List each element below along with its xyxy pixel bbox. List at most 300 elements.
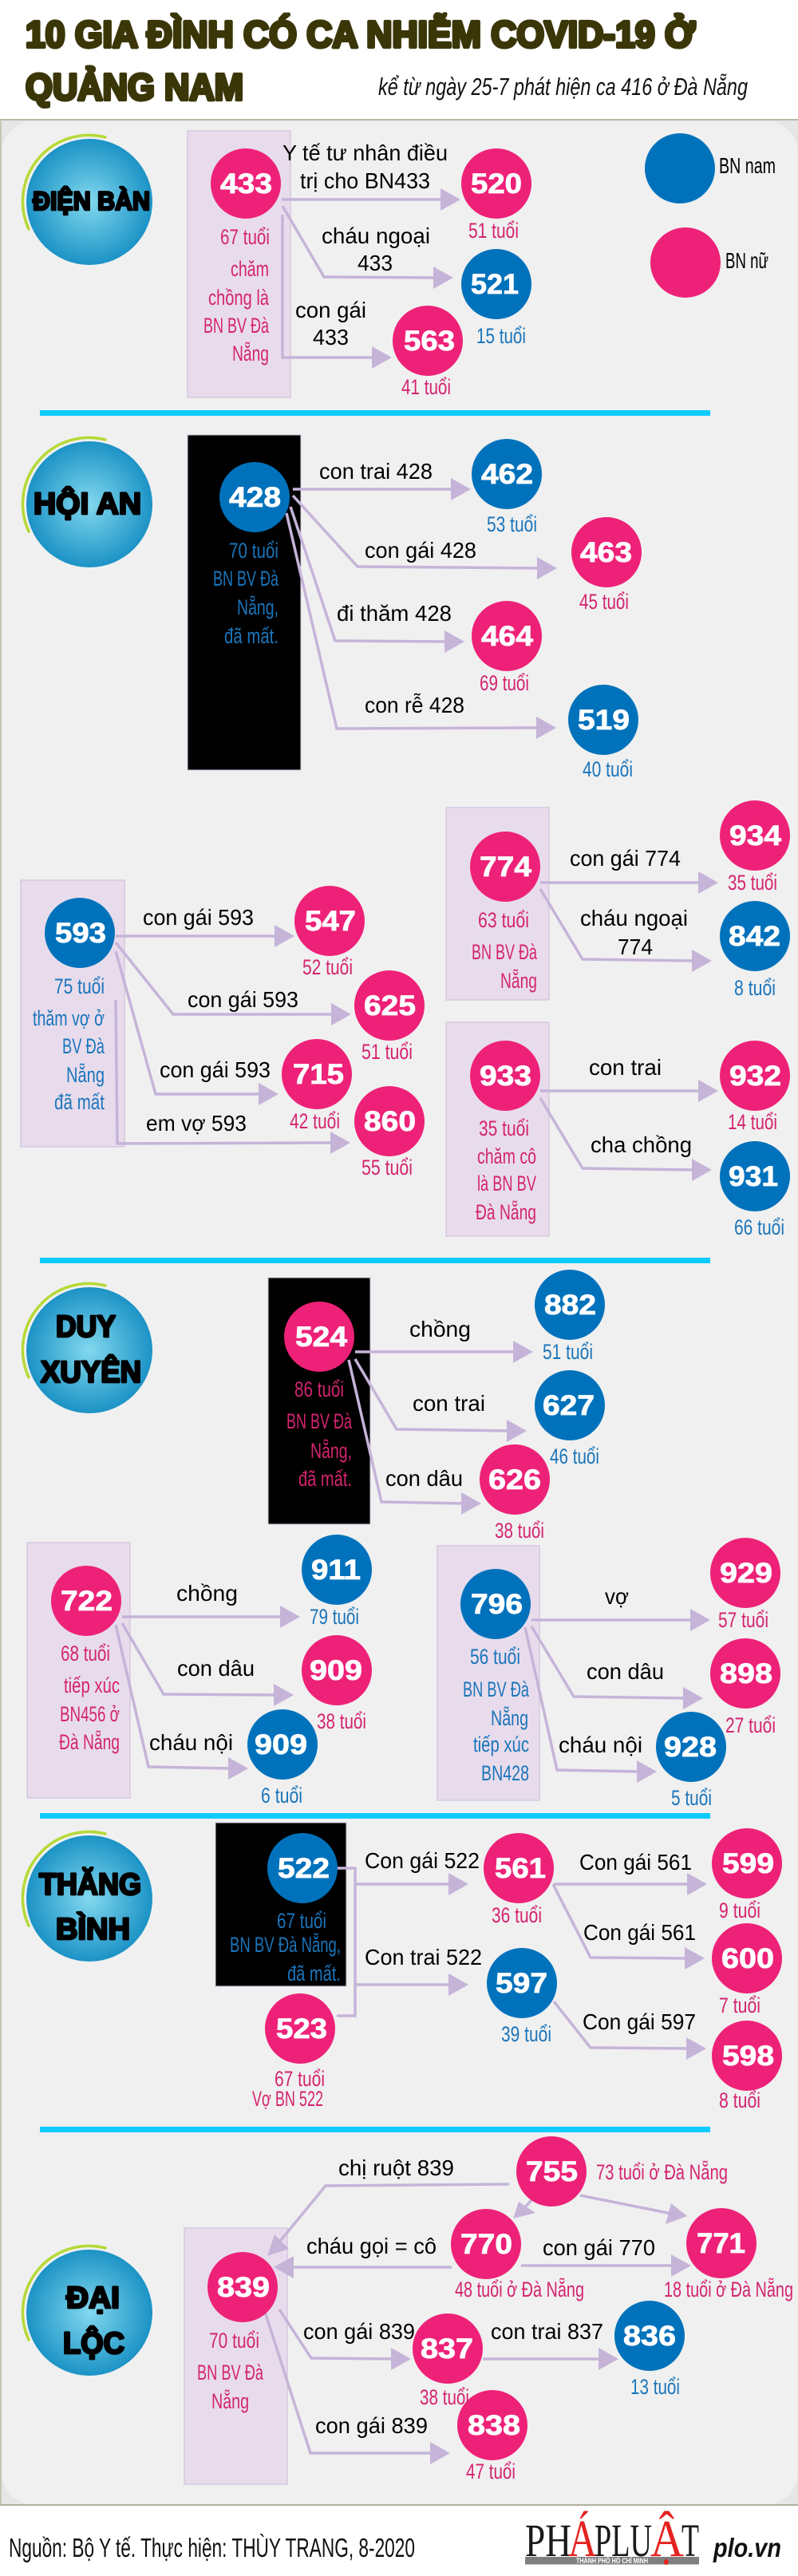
relation labels: con trai 428 [319,459,433,484]
arrow: 796 to 928 [525,1627,657,1783]
relation labels: 774 [618,934,653,959]
node 882: 882 [544,1290,596,1321]
text: 428 details [213,539,279,648]
node 774 [470,832,540,902]
panel: Thăng Bình [22,1823,782,2112]
ages: 79 tuổi [310,1605,359,1629]
node 839 [207,2252,278,2322]
arrow: 933 to 931 [540,1098,712,1181]
arrow: 433 to 520 [282,188,460,211]
badge: Đại Lộc [22,2246,152,2376]
node 755 [516,2136,587,2207]
ages: 51 tuổi [468,219,519,243]
node 521 [461,249,531,319]
ages: 53 tuổi [487,512,537,536]
node 771 [686,2208,757,2278]
arrow: 933 to 932 [540,1080,718,1102]
ages [261,1605,366,1808]
ages: 42 tuổi [290,1109,340,1133]
relation labels: con gái 839 [303,2319,415,2344]
node 909 pink: 909 [310,1655,362,1686]
text: 839 details [197,2329,264,2413]
arrow: 524 to 627 [355,1359,527,1442]
text: 593 details: Nẵng [66,1062,105,1087]
node 520 [461,148,531,219]
text: 522 details: 67 tuổi [277,1909,326,1933]
node 933: 933 [480,1061,531,1092]
node 898: 898 [720,1658,772,1689]
node 836 [614,2301,685,2371]
arrow: to 597 [355,1973,468,1996]
node 428 [219,462,290,532]
relation labels: Con gái 522 [365,1848,480,1873]
relation labels: con gái 774 [570,846,681,871]
node 600: 600 [721,1943,774,1974]
ages: 6 tuổi [261,1784,302,1808]
badge: Điện Bàn [22,135,152,265]
node 934 [720,800,790,871]
relation labels [385,1317,485,1491]
text: 796 details: tiếp xúc [473,1732,529,1756]
box: patient 722 [27,1543,130,1798]
relation labels: chị ruột 839 [338,2155,454,2180]
relation labels: con gái 839 [315,2413,428,2438]
arrow: 593 to 547 [116,925,294,947]
ages: 47 tuổi [466,2459,516,2483]
relation labels: con dâu [385,1466,463,1491]
box: patient 428 [188,435,301,770]
logo: plo.vn: plo.vn [713,2533,781,2562]
badge: Đại Lộc: LỘC [63,2325,124,2361]
ages: 14 tuổi [728,1110,777,1134]
arrow: 524 to 882 [355,1341,533,1363]
text: 933 details [476,1116,536,1224]
node 842 [720,901,790,971]
node 722: 722 [61,1586,113,1617]
panel: Hội An [21,435,790,1239]
legend: BN nữ [725,248,768,273]
node 837 [413,2313,483,2384]
ages [728,1110,784,1239]
node 755: 755 [526,2156,578,2187]
relation labels: con dâu [587,1659,664,1684]
node 524 [284,1302,354,1372]
box: patient 593 [21,880,124,1147]
node 842: 842 [729,921,780,952]
arrow: 593 to 625 [116,942,351,1025]
relation labels: Con gái 561 [583,1920,696,1945]
node 462 [472,439,542,509]
title: 10 GIA ĐÌNH CÓ CA NHIỄM COVID-19 Ở [26,14,696,55]
arrow: 593 to 860 [116,1000,350,1154]
text: 933 details: 35 tuổi [479,1116,529,1140]
node 523: 523 [276,2013,327,2045]
node 522 [267,1833,338,1903]
node 929 [710,1538,780,1608]
node 593 [45,898,115,968]
arrow: 433 to 563 [282,215,392,369]
text: 774 details: BN BV Đà [472,940,538,964]
node 598 [712,2021,782,2091]
text: 933 details: chăm cô [477,1144,536,1168]
text: 933 details: là BN BV [477,1171,536,1195]
node 433: 433 [220,168,272,200]
title: QUẢNG NAM [26,66,243,108]
node 524: 524 [295,1322,348,1353]
text: 433 details: chồng là [208,286,270,310]
relation labels: Con trai 522 [365,1945,482,1970]
ages: 27 tuổi [725,1713,776,1737]
relation labels: Con gái 561 [579,1850,692,1875]
arrow: 839 to 837 [279,2309,411,2370]
ages: 48 tuổi ở Đà Nẵng [455,2277,584,2301]
node 563: 563 [404,326,455,357]
arrow: 524 to 626 [349,1360,481,1515]
ages: 8 tuổi [719,2088,760,2112]
relation labels: con trai [413,1391,485,1416]
panel: Đại Lộc [22,2136,793,2484]
node 428: 428 [229,482,281,513]
logo: Pháp Luật: Á [568,2510,597,2568]
relation labels: con gái 593 [160,1057,271,1082]
logo: Pháp Luật: Ậ [650,2510,684,2568]
node 563 [393,306,463,376]
ages: 46 tuổi [550,1444,599,1468]
text: 433 details: Nẵng [232,341,269,365]
node 597 [487,1948,557,2018]
text: 796 details: BN428 [481,1761,529,1785]
node 626 [480,1444,550,1515]
text: 593 details: đã mất [54,1090,105,1114]
ages: 39 tuổi [501,2022,551,2046]
text: 433 details: 67 tuổi [220,225,270,249]
text: 428 details: Nẵng, [237,595,279,619]
text: 523 details: Vợ BN 522 [252,2087,323,2111]
relation labels: con gái 770 [543,2235,655,2260]
relation labels [282,140,448,350]
text: 722 details: tiếp xúc [64,1673,120,1697]
node 600 [712,1923,782,1993]
ages: 5 tuổi [671,1786,712,1810]
node 771: 771 [697,2228,745,2259]
arrow: 770 to 839 [274,2256,452,2278]
ages: 35 tuổi [728,871,777,895]
relation labels: cháu ngoại [322,223,430,248]
ages: 7 tuổi [719,1993,760,2017]
box: patient 524 [268,1278,370,1524]
node 625 [354,970,425,1041]
badge: Duy Xuyên [22,1283,152,1413]
text: 523 details [252,2067,325,2111]
arrow: 593 to 715 [116,951,279,1105]
node 519: 519 [578,705,630,736]
node 715: 715 [293,1059,344,1090]
relation labels: vợ [605,1584,629,1609]
relation labels [143,905,298,1136]
text: 774 details: Nẵng [500,968,537,993]
arrow: 722 to 909 pink [122,1623,294,1706]
node 911 [302,1535,372,1605]
node 882 [535,1270,605,1340]
arrow: 770 to 771 [521,2254,691,2277]
arrow: 796 to 929 [531,1609,710,1631]
text: 796 details: BN BV Đà [463,1677,530,1701]
node 598: 598 [722,2041,774,2072]
text: 839 details: Nẵng [211,2388,249,2413]
arrow: 774 to 842 [540,889,712,972]
node 931: 931 [729,1161,778,1192]
node 770: 770 [460,2229,512,2260]
relation labels: con gái 593 [143,905,254,930]
text: 774 details: 63 tuổi [478,908,529,932]
ages: 8 tuổi [734,976,776,1000]
relation labels: con trai 837 [491,2319,603,2344]
ages [420,2159,793,2483]
ages: 69 tuổi [480,671,529,695]
title [26,14,696,108]
node 928: 928 [664,1732,717,1763]
badge: Thăng Bình [22,1831,152,1962]
box: patient 839 [184,2228,287,2484]
arrow: 428 to 464 [290,507,464,653]
node 836: 836 [623,2321,676,2352]
ages: 13 tuổi [630,2375,680,2399]
text: 722 details: Đà Nẵng [59,1729,120,1754]
relation labels: con dâu [177,1656,255,1681]
relation labels: trị cho BN433 [300,168,430,193]
logo: Pháp Luật: PH [525,2515,571,2566]
text: 524 details: 86 tuổi [294,1377,344,1401]
relation labels [149,1581,255,1755]
arrow: 722 to 909 blue [116,1625,248,1780]
arrow: 428 to 519 [286,513,556,739]
node 561: 561 [495,1853,546,1884]
ages: 57 tuổi [718,1608,768,1632]
text: 722 details: 68 tuổi [61,1642,110,1665]
text: 522 details: đã mất. [287,1962,341,1985]
text: 428 details: 70 tuổi [229,539,279,563]
box: patient 522 [215,1823,346,1986]
node 796 [460,1569,531,1639]
relation labels: Y tế tư nhân điều [282,140,448,165]
badge: Thăng Bình: BÌNH [56,1911,130,1946]
text: 593 details: thăm vợ ở [33,1006,105,1030]
text: 593 details [33,974,105,1114]
relation labels: cháu gọi = cô [306,2234,437,2258]
node 932 [720,1041,790,1111]
relation labels: con gái [295,298,366,322]
node 715 [282,1039,352,1109]
text: 593 details: 75 tuổi [54,974,105,998]
relation labels: 433 [313,325,349,350]
text: 524 details: Nẵng, [310,1438,352,1463]
text: 796 details: Nẵng [491,1705,528,1730]
text: 593 details: BV Đà [62,1034,105,1058]
text: 428 details: BN BV Đà [213,567,279,591]
footer credit: Nguồn: Bộ Y tế. Thực hiện: THÙY TRANG, 8-2020 [9,2533,415,2562]
ages: 9 tuổi [719,1898,760,1922]
node 722 [51,1566,121,1636]
badge: Thăng Bình: THĂNG [39,1867,141,1902]
ages [401,219,526,399]
ages: 51 tuổi [361,1040,413,1064]
node 462: 462 [481,459,533,490]
relation labels: con gái 593 [188,987,298,1012]
arrow: to 561 [355,1873,468,1895]
node 929: 929 [720,1558,772,1589]
ages [671,1608,776,1810]
logo: Pháp Luật [525,2510,699,2568]
arrow: 755 to 839 [267,2184,509,2256]
arrow: 433 to 521 [282,206,453,289]
text: 433 details: BN BV Đà [203,314,270,338]
node 909 blue: 909 [255,1729,307,1760]
relation labels: chồng [409,1317,471,1341]
relation labels [570,846,688,959]
text: 933 details: Đà Nẵng [476,1199,536,1224]
relation labels [303,2155,655,2438]
relation labels: em vợ 593 [146,1111,247,1136]
arrow: 722 to 911 [122,1606,300,1628]
text: 522 details: BN BV Đà Nẵng, [230,1932,341,1957]
node 860 [354,1086,425,1156]
node 463: 463 [580,537,632,568]
text: 433 details [203,225,270,365]
text: 796 details [463,1645,530,1785]
node 433 [211,148,281,219]
node 770 [451,2209,521,2279]
badge: Đại Lộc: ĐẠI [66,2282,120,2315]
logo: Pháp Luật: THÀNH PHỐ HỒ CHÍ MINH [576,2556,648,2565]
relation labels: cháu nội [149,1730,233,1755]
arrow: 428 to 462 [293,478,471,500]
relation labels: cháu ngoại [580,906,688,930]
text: 796 details: 56 tuổi [470,1645,520,1669]
relation labels: cháu nội [559,1732,642,1757]
arrow: 561 to 600 [553,1884,705,1970]
relation labels [319,459,476,717]
node 520: 520 [471,168,522,200]
node 521: 521 [471,269,519,300]
node 547 [294,886,365,956]
relation labels [589,1055,692,1157]
panel: Duy Xuyên [22,1270,780,1810]
node 561 [484,1833,554,1903]
node 839: 839 [217,2272,270,2303]
text: 524 details [286,1377,353,1491]
badge: Hội An: HỘI AN [34,485,141,521]
node 796: 796 [471,1589,523,1620]
ages [290,955,413,1179]
relation labels [365,1848,696,2034]
text: 524 details: đã mất. [298,1467,352,1491]
text: 774 details [472,908,538,993]
text: 722 details: BN456 ở [60,1702,120,1726]
ages [492,1898,760,2112]
relation labels: cha chồng [591,1132,692,1157]
node 837: 837 [421,2333,473,2365]
text: 839 details: 70 tuổi [209,2329,259,2353]
node 931 [720,1141,790,1211]
node 593: 593 [55,918,106,949]
node 599: 599 [722,1848,774,1879]
arrow: 837 to 836 [483,2348,618,2370]
badge: Duy Xuyên: XUYÊN [41,1354,141,1389]
badge: Hội An [22,437,152,567]
legend: BN nam [719,153,776,178]
logo: Pháp Luật: T [681,2515,699,2566]
text: 523 details: 67 tuổi [275,2067,325,2091]
relation labels: chồng [176,1581,238,1606]
ages: 66 tuổi [734,1215,784,1239]
node 909 pink [302,1635,372,1705]
logo: Pháp Luật: PLU [595,2515,652,2566]
ages: 36 tuổi [492,1903,542,1927]
relation labels: Con gái 597 [583,2009,696,2034]
arrow: 839 to 838 [265,2312,450,2464]
ages: 51 tuổi [543,1340,593,1364]
text: 839 details: BN BV Đà [197,2361,264,2384]
text: 524 details: BN BV Đà [286,1409,353,1433]
node 626: 626 [488,1464,541,1495]
node 627 [535,1370,605,1440]
relation labels: con trai [589,1055,662,1080]
node 627: 627 [543,1390,595,1421]
node 909 blue [247,1709,318,1780]
ages: 38 tuổi [495,1519,544,1543]
legend [645,133,776,298]
node 523 [265,1993,335,2064]
node 911: 911 [311,1555,361,1586]
arrow: 774 to 934 [540,871,718,894]
ages: 40 tuổi [583,757,633,781]
relation labels: đi thăm 428 [337,601,452,626]
node 928 [656,1712,726,1782]
ages: 55 tuổi [361,1156,413,1179]
ages [495,1340,599,1543]
node 522: 522 [278,1853,330,1884]
node 547: 547 [305,906,356,937]
node 625: 625 [364,990,416,1021]
arrow: 597 to 598 [554,2001,706,2060]
box: patient 433 [188,131,290,397]
arrow: 561 to 599 [554,1873,707,1895]
relation labels: con rễ 428 [365,693,464,717]
arrow: 755 to 771 [580,2195,687,2224]
arrow: 796 to 898 [531,1626,703,1709]
box: patient 796 [437,1546,539,1800]
node 838: 838 [468,2410,520,2441]
node 932: 932 [729,1061,781,1092]
node 464 [472,601,542,671]
box: patient 933 [446,1022,549,1236]
arrow: 428 to 463 [293,496,557,579]
node 860: 860 [364,1106,416,1137]
node 934: 934 [729,820,782,851]
node 933 [470,1041,540,1111]
text: 722 details [59,1642,120,1754]
badge: Duy Xuyên: DUY [56,1310,116,1344]
node 774: 774 [480,851,532,883]
ages: 15 tuổi [476,324,526,348]
node 597: 597 [496,1968,547,1999]
node 599 [712,1828,782,1898]
ages [480,512,633,781]
relation labels: con gái 428 [365,538,476,563]
ages: 52 tuổi [302,955,353,979]
ages: 41 tuổi [401,375,451,399]
ages [728,871,777,1000]
